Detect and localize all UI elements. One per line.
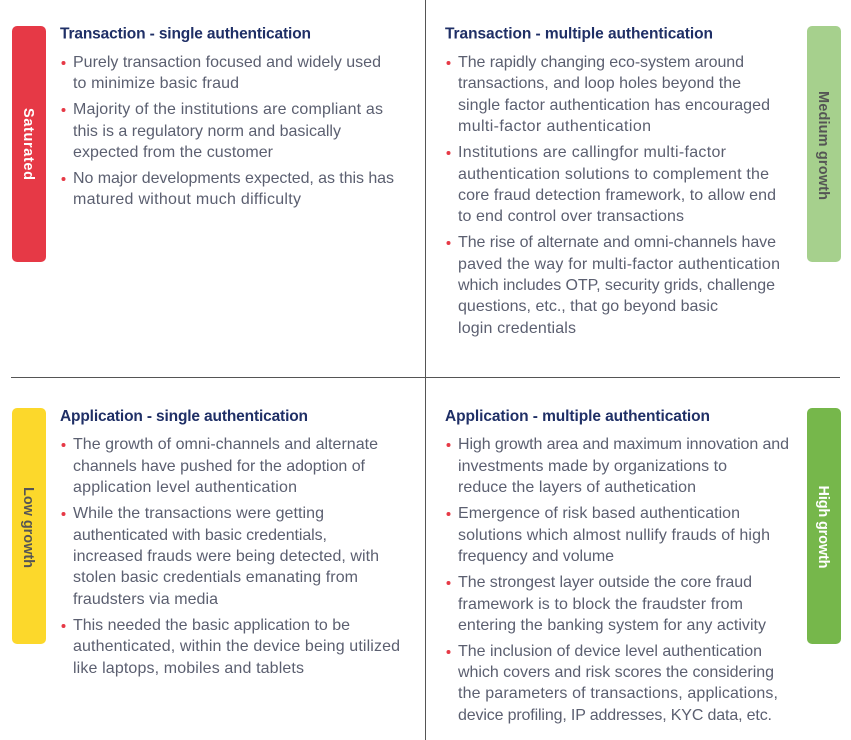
bullet: eco-system: single factor authentication has encouraged [458,97,770,114]
bullet: institutions calling: core fraud detection framework, to allow end [458,187,776,204]
bullet: device level authentication: The inclusion of device level authentication [458,643,762,660]
bullet: no major developments: No major developments expected, as this has [73,170,394,187]
bullet: alternate and omni-channels: login credentials [458,320,576,337]
status bar: high growth: High growth [815,486,831,568]
bullet: institutions calling: Institutions are callingfor multi-factor [458,144,727,161]
bullet: increased frauds: fraudsters via media [73,591,218,608]
heading: transaction single authentication: Transaction - single authentication [60,26,311,42]
bullet: risk based authentication: solutions which almost nullify frauds of high [458,527,770,544]
bullet: application authenticated on device: This needed the basic application to be [73,617,350,634]
bullet: risk based authentication: frequency and volume [458,548,614,565]
status bar: medium growth: Medium growth [815,91,831,200]
bullet: purely transaction focused: to minimize basic fraud [73,75,239,92]
bullet: application authenticated on device: authenticated, within the device being utilized [73,638,400,655]
bullet: alternate and omni-channels: paved the way for multi-factor authentication [458,256,780,273]
bullet: eco-system: multi-factor authentication [458,118,651,135]
bullet: strongest layer: entering the banking system for any activity [458,617,766,634]
bullet: eco-system: The rapidly changing eco-system around [458,54,744,71]
status bar: medium growth [807,26,841,262]
bullet: device level authentication: which covers and risk scores the considering [457,664,774,681]
bullet: institutions calling: to end control over transactions [458,208,684,225]
panel: application multiple authentication [445,408,841,724]
bullet: omni-channels growth [62,436,378,496]
bullet: alternate and omni-channels: which includes OTP, security grids, challenge [457,277,775,294]
bullet: alternate and omni-channels [446,234,780,337]
bullet: device level authentication [446,643,778,724]
bullet: omni-channels growth: The growth of omni-channels and alternate [73,436,378,453]
heading: application multiple authentication: Application - multiple authentication [445,408,710,425]
bullet: majority compliant: Majority of the institutions are compliant as [73,101,383,118]
bullet: device level authentication: the parameters of transactions, applications, [458,685,778,702]
panel: application single authentication [12,408,400,677]
heading: transaction multiple authentication: Transaction - multiple authentication [445,26,713,42]
status bar: saturated [12,26,46,262]
bullet: application authenticated on device: like laptops, mobiles and tablets [73,660,304,677]
bullet: risk based authentication: Emergence of risk based authentication [458,505,740,522]
bullet: increased frauds: stolen basic credentials emanating from [73,569,358,586]
bullet: increased frauds [62,505,379,608]
bullet: alternate and omni-channels: questions, etc., that go beyond basic [458,298,718,315]
status bar: low growth [12,408,46,644]
bullet: majority compliant: expected from the customer [73,144,274,161]
bullet: alternate and omni-channels: The rise of alternate and omni-channels have [458,234,776,251]
bullet: high growth area [446,436,789,496]
panel: transaction multiple authentication [445,26,841,337]
status bar: low growth: Low growth [20,487,36,568]
bullet: purely transaction focused: Purely transaction focused and widely used [73,54,381,71]
bullet: no major developments [62,170,394,208]
status bar: saturated: Saturated [20,108,36,180]
bullet: increased frauds: increased frauds were being detected, with [73,548,379,565]
panel: transaction single authentication [12,26,394,262]
bullet: increased frauds: While the transactions were getting [73,505,324,522]
bullet: strongest layer: framework is to block the fraudster from [458,596,743,613]
bullet: high growth area: reduce the layers of authetication [458,479,696,496]
bullet: majority compliant: this is a regulatory norm and basically [73,123,341,140]
heading: application single authentication: Application - single authentication [60,408,308,425]
bullet: high growth area: investments made by organizations to [458,458,727,475]
bullet: majority compliant [62,101,383,161]
bullet: high growth area: High growth area and maximum innovation and [458,436,789,453]
bullet: increased frauds: authenticated with basic credentials, [73,527,327,544]
bullet: institutions calling: authentication solutions to complement the [458,166,769,183]
bullet: omni-channels growth: channels have pushed for the adoption of [73,458,366,475]
bullet: no major developments: matured without much difficulty [73,191,301,208]
bullet: eco-system: transactions, and loop holes beyond the [458,75,741,92]
bullet: application authenticated on device [62,617,400,677]
bullet: purely transaction focused [62,54,381,92]
status bar: high growth [807,408,841,644]
bullet: device level authentication: device profiling, IP addresses, KYC data, etc. [458,707,772,724]
bullet: strongest layer [446,574,766,634]
bullet: strongest layer: The strongest layer outside the core fraud [458,574,752,591]
bullet: risk based authentication [446,505,770,565]
bullet: eco-system [446,54,770,135]
bullet: omni-channels growth: application level authentication [73,479,297,496]
bullet: institutions calling [446,144,776,225]
